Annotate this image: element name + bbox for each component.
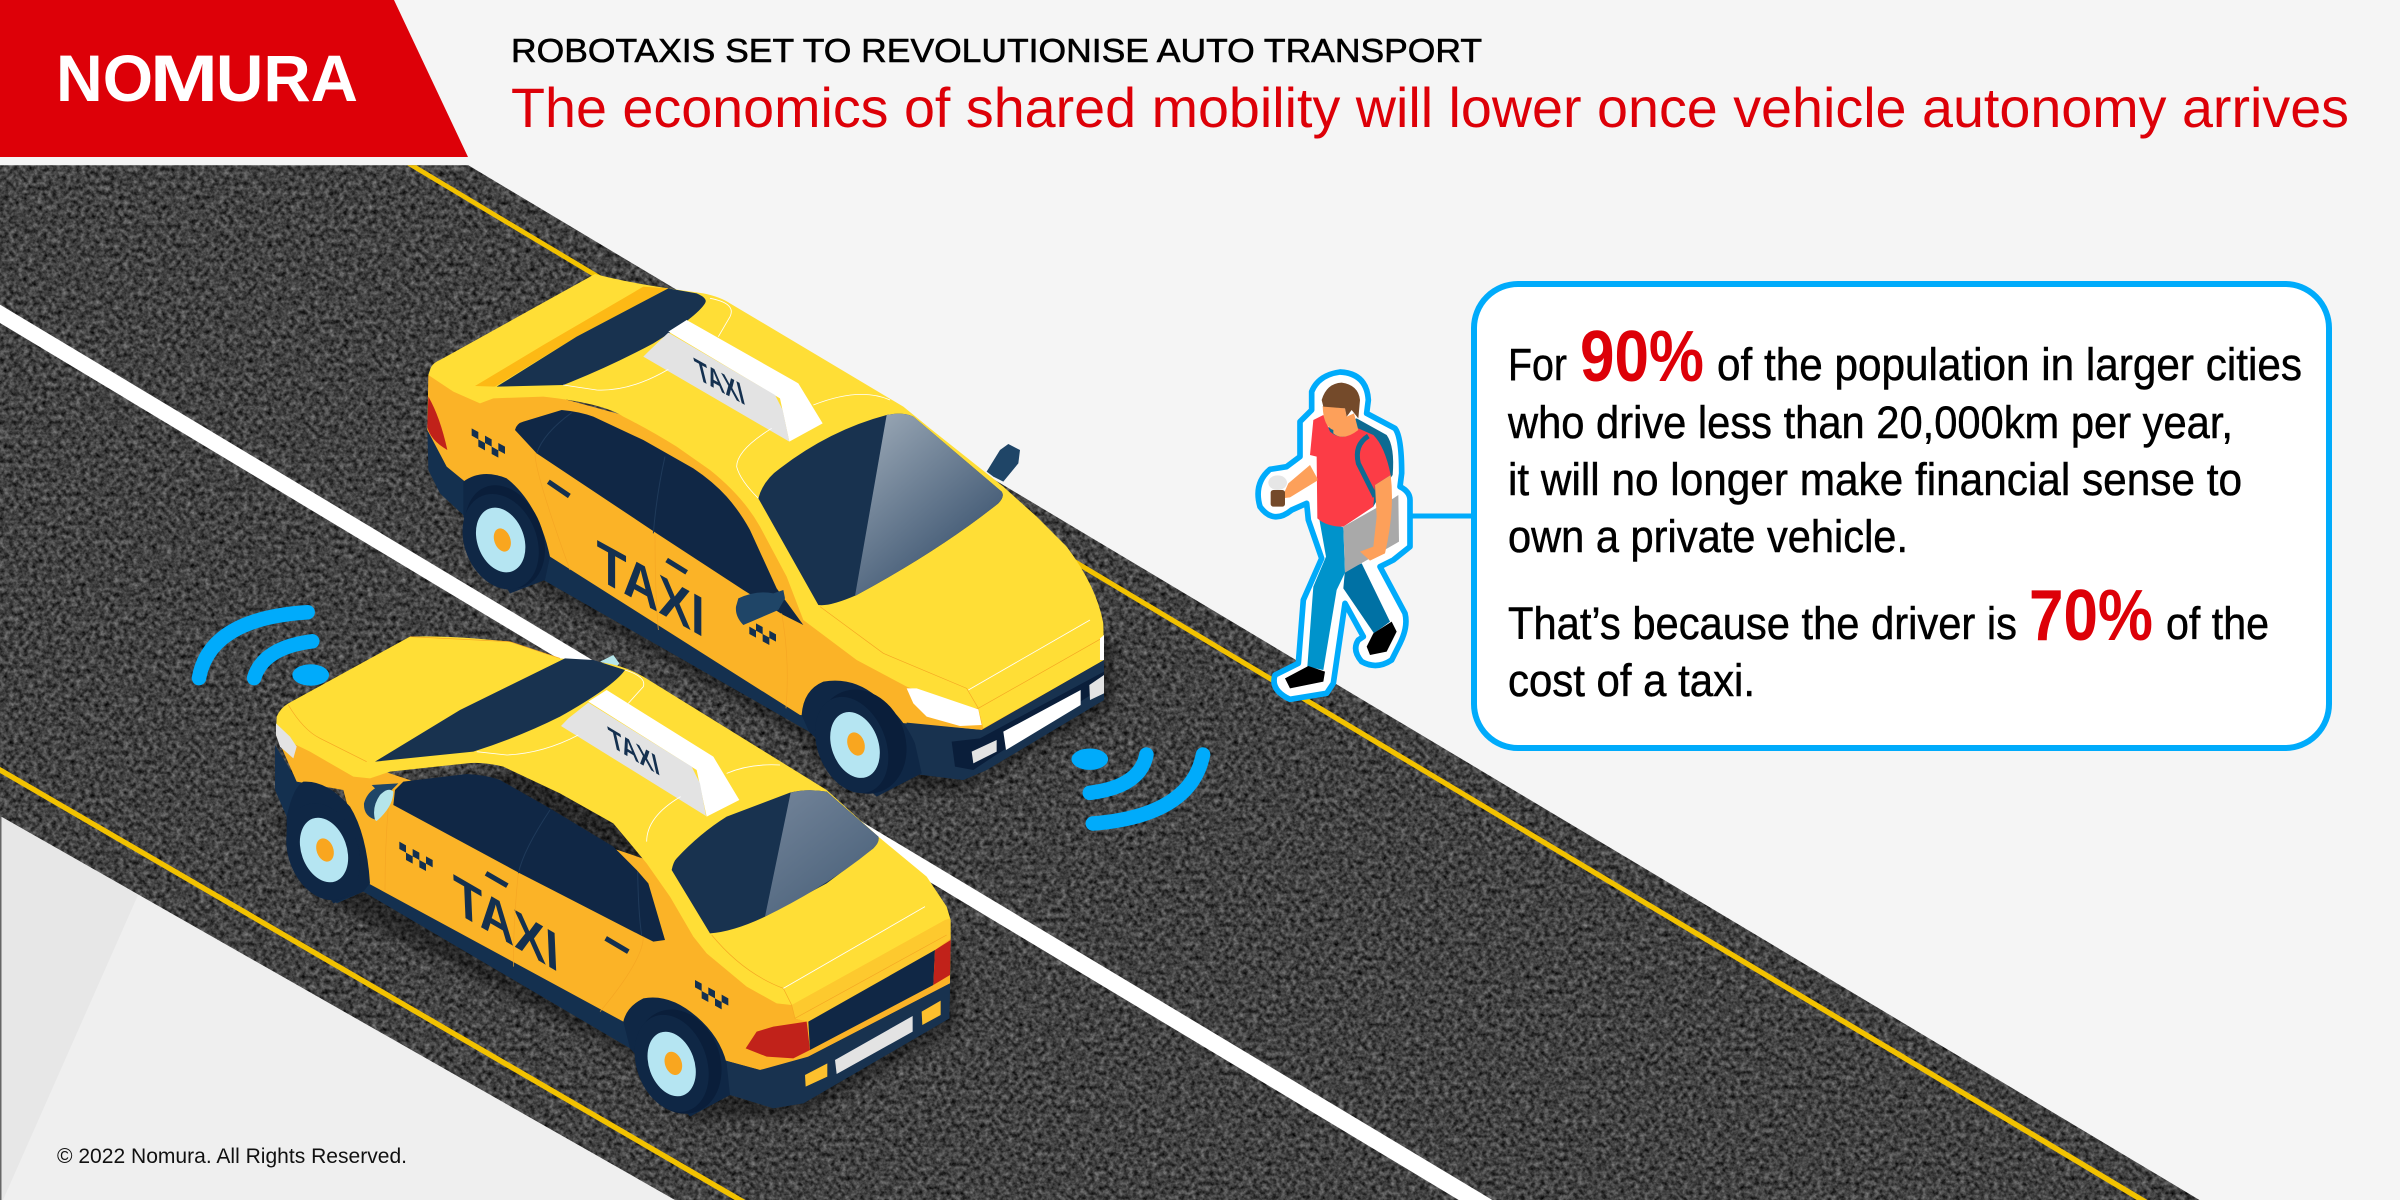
rear panel: [808, 950, 935, 1050]
callout paragraph 1: 90%: [1580, 317, 1704, 397]
front leg: [1307, 519, 1345, 670]
grille: [952, 672, 1104, 770]
laptop: [1343, 495, 1399, 573]
strap: [1357, 436, 1375, 497]
backpack: [1317, 418, 1393, 507]
roof sign: [561, 690, 739, 817]
body lettering: TAXI: [597, 527, 705, 650]
main headline: The economics of shared mobility will lower once vehicle autonomy arrives: [511, 76, 2349, 139]
pedestrian: [1258, 372, 1410, 699]
bumper: [723, 983, 950, 1108]
taxi: lower car: [273, 636, 957, 1126]
far mirror: [987, 444, 1020, 482]
front wheel: [621, 997, 736, 1126]
checker marks: [399, 842, 433, 871]
door creases: [535, 453, 1102, 708]
reflectors: [805, 1001, 941, 1087]
underbody: [275, 745, 951, 1113]
taxi: upper car: [427, 274, 1113, 807]
icon: wireless signal, upper left: [199, 612, 329, 686]
rear window strip: [475, 287, 668, 387]
front lamps: [972, 635, 1104, 763]
face: [1323, 406, 1358, 437]
icon: wireless signal, lower right: [1071, 748, 1203, 823]
holding arm: [1360, 475, 1392, 561]
callout paragraph 2: 70%: [2029, 576, 2153, 656]
rear window: [497, 288, 706, 387]
orange body side: [427, 375, 1104, 730]
near mirror: [364, 783, 398, 821]
connector line: [1408, 514, 1475, 518]
sign lettering: TAXI: [606, 720, 663, 784]
front wheel: [801, 676, 922, 807]
callout paragraph 2: cost of a taxi.: [1508, 655, 1755, 706]
t-shirt: [1310, 415, 1391, 527]
callout paragraph 1: own a private vehicle.: [1508, 511, 1908, 562]
rear window: [375, 658, 625, 762]
roof and trunk lines: [477, 670, 925, 988]
callout paragraph 2: of the: [2166, 598, 2269, 649]
logo wordmark: NO: [56, 41, 153, 115]
window dividers: [537, 413, 665, 533]
lettering bar and door handle: [548, 482, 687, 572]
coffee cup: [1268, 475, 1287, 507]
callout paragraph 1: of the population in larger cities: [1717, 339, 2302, 390]
near mirror: [736, 590, 785, 625]
front bumper: [907, 660, 1104, 780]
underbody: [427, 427, 1104, 780]
roof and hood lines: [563, 298, 1090, 690]
roof sign: [643, 320, 823, 442]
callout paragraph 1: For: [1508, 339, 1567, 390]
callout paragraph 1: it will no longer make financial sense to: [1508, 454, 2242, 505]
header tab with logo: [0, 0, 468, 157]
kicker heading: ROBOTAXIS SET TO REVOLUTIONISE AUTO TRANSPORT: [511, 32, 1482, 69]
hair: [1322, 383, 1360, 418]
door creases: [288, 637, 947, 1018]
licence plate: [1003, 690, 1081, 750]
left tail lamp: [276, 723, 297, 758]
copyright: © 2022 Nomura. All Rights Reserved.: [57, 1145, 407, 1168]
callout paragraph 1: who drive less than 20,000km per year,: [1507, 397, 2233, 448]
yellow top surfaces: [276, 636, 951, 1022]
window dividers: [518, 810, 642, 935]
yellow top surfaces: [428, 274, 1104, 728]
callout box: [1474, 284, 2329, 748]
callout paragraph 2: [1508, 576, 2269, 706]
windscreen: [672, 790, 879, 933]
windscreen: [758, 414, 1003, 605]
checker marks: [472, 428, 505, 458]
windscreen glare: [765, 790, 879, 917]
trunk lip: [792, 918, 951, 1022]
windscreen glare: [855, 414, 1003, 596]
checker marks: [695, 980, 728, 1009]
rear wheel: [449, 473, 560, 601]
callout paragraph 1: [1507, 317, 2302, 562]
side window: [515, 410, 803, 625]
body lettering: TAXI: [452, 862, 560, 985]
outline: [1258, 372, 1410, 699]
tail lights: [746, 940, 951, 1058]
logo wordmark: M: [150, 41, 218, 115]
rear wheel: [273, 782, 373, 911]
far mirror: [600, 655, 619, 667]
side window: [393, 774, 665, 942]
cup arm: [1282, 465, 1317, 498]
lettering bar and door handle: [486, 873, 628, 952]
logo wordmark: URA: [216, 41, 358, 115]
tail light: [427, 397, 447, 450]
shoes: [1285, 622, 1397, 688]
sign lettering: TAXI: [692, 352, 748, 413]
headlight: [907, 688, 982, 726]
callout paragraph 2: That’s because the driver is: [1508, 598, 2017, 649]
lower-left pale ground: [0, 815, 675, 1200]
road with lane markings: [0, 165, 2199, 1200]
back leg: [1343, 563, 1390, 633]
checker marks: [749, 623, 776, 645]
licence plate: [835, 1016, 913, 1074]
orange body side: [276, 735, 951, 1070]
